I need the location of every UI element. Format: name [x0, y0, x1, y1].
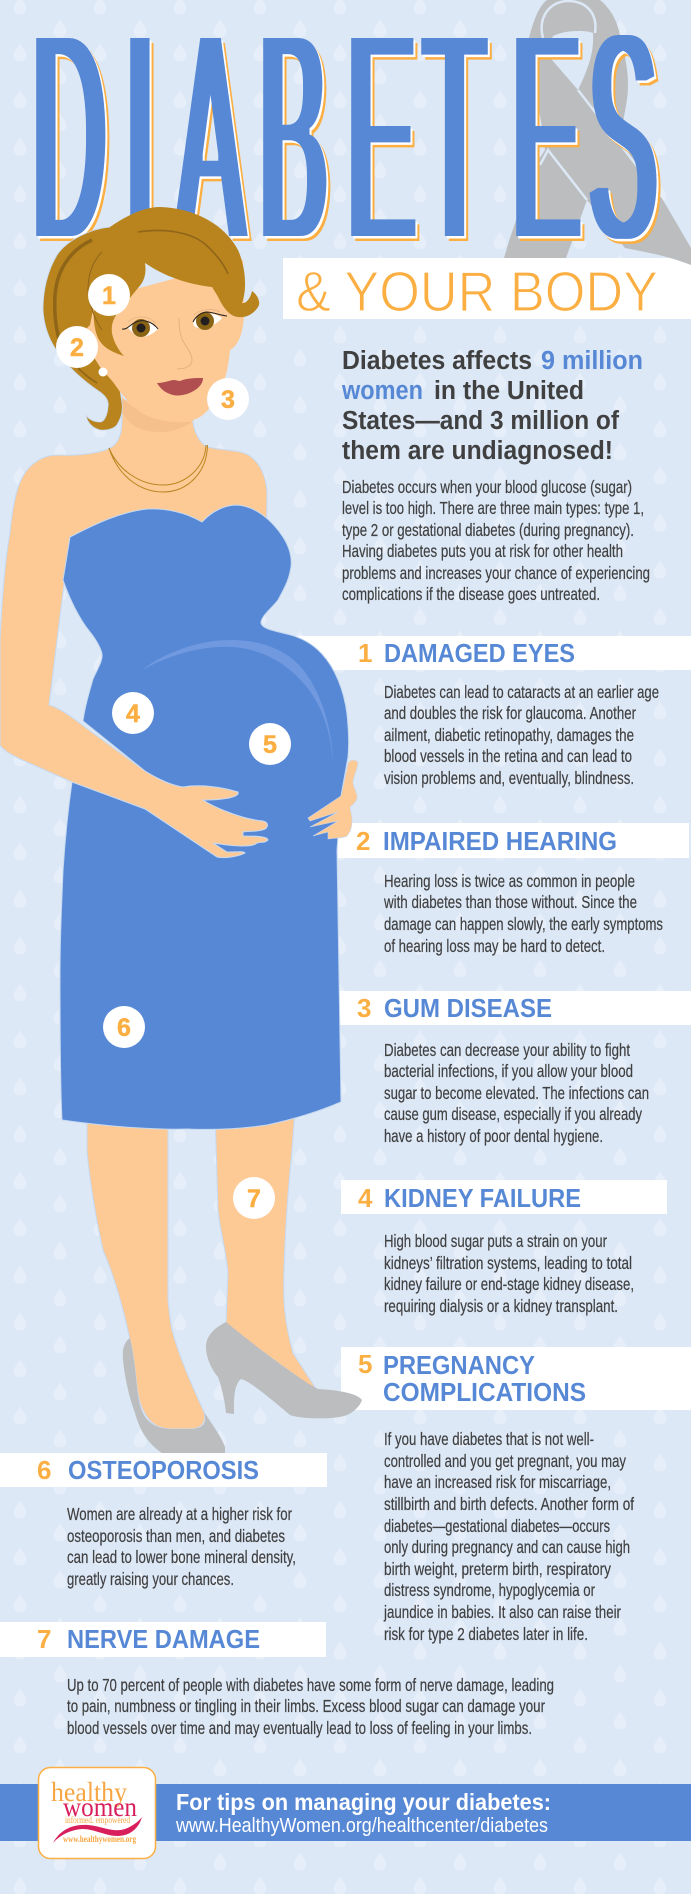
logo: healthy women — [38, 1768, 156, 1858]
body text 3: have a history of poor dental hygiene. — [384, 1126, 603, 1146]
intro heading: in the United — [434, 377, 584, 405]
heading band 4 — [341, 1180, 667, 1214]
logo: healthy women: women — [63, 1792, 137, 1822]
panel: kidney failure — [341, 1180, 667, 1316]
marker 1 — [88, 274, 130, 316]
body text 5: birth weight, preterm birth, respiratory — [384, 1559, 611, 1579]
heading band 5 — [341, 1347, 691, 1410]
dress — [60, 505, 349, 1129]
heading band 6 — [0, 1453, 327, 1487]
body text 5: diabetes—gestational diabetes—occurs — [384, 1516, 610, 1536]
marker 3: 3 — [221, 386, 235, 414]
number 1: 1 — [358, 638, 372, 668]
body text 7: to pain, numbness or tingling in their limbs. Excess blood sugar can damage your — [67, 1696, 545, 1716]
number 7: 7 — [37, 1624, 51, 1654]
heading: damaged eyes: DAMAGED EYES — [384, 638, 575, 668]
intro heading — [341, 347, 643, 465]
intro heading: Diabetes affects — [342, 347, 532, 375]
logo: healthy women: www.healthywomen.org — [63, 1834, 136, 1844]
heading: impaired hearing: IMPAIRED HEARING — [383, 826, 617, 856]
intro heading: them are undiagnosed! — [342, 437, 613, 465]
marker 1: 1 — [102, 282, 116, 310]
marker 2: 2 — [70, 334, 84, 362]
body text 4: requiring dialysis or a kidney transplant. — [384, 1296, 618, 1316]
body text 5 — [383, 1429, 634, 1644]
body text 7 — [67, 1675, 554, 1738]
marker 5 — [249, 723, 291, 765]
body text 6: greatly raising your chances. — [67, 1569, 234, 1589]
lips — [157, 378, 203, 396]
heading: osteoporosis: OSTEOPOROSIS — [68, 1455, 259, 1485]
hair back — [43, 227, 140, 430]
body text 5: jaundice in babies. It also can raise their — [383, 1602, 621, 1622]
body text 3 — [384, 1040, 649, 1146]
icon: awareness ribbon — [504, 0, 691, 265]
earring — [98, 368, 108, 376]
body text 5: risk for type 2 diabetes later in life. — [384, 1624, 588, 1644]
right hand — [308, 760, 358, 839]
heading: kidney failure: KIDNEY FAILURE — [384, 1183, 581, 1213]
marker 4: 4 — [126, 700, 140, 728]
marker 5: 5 — [263, 731, 277, 759]
body text 4: High blood sugar puts a strain on your — [384, 1231, 607, 1251]
intro heading: women — [341, 377, 423, 405]
body text 6 — [67, 1504, 296, 1589]
body text 5: distress syndrome, hypoglycemia or — [384, 1580, 595, 1600]
panel: damaged eyes — [290, 636, 691, 788]
left shoe — [123, 1338, 225, 1455]
marker 7: 7 — [247, 1185, 261, 1213]
number 6: 6 — [37, 1455, 51, 1485]
heading: gum disease: GUM DISEASE — [384, 993, 552, 1023]
legs — [87, 1110, 318, 1429]
heading: pregnancy complications: PREGNANCY — [383, 1350, 535, 1380]
white band behind subtitle — [283, 258, 691, 319]
marker 2 — [56, 326, 98, 368]
hair fringe — [94, 207, 259, 356]
intro heading: 9 million — [541, 347, 643, 375]
necklace — [109, 445, 208, 492]
body text 6: osteoporosis than men, and diabetes — [67, 1526, 285, 1546]
number 4: 4 — [358, 1183, 373, 1213]
intro heading: States—and 3 million of — [342, 407, 619, 435]
heading band 3 — [330, 991, 691, 1025]
number 5: 5 — [358, 1349, 372, 1379]
body text 2 — [383, 871, 663, 956]
marker 4 — [112, 692, 154, 734]
subtitle: & YOUR BODY — [296, 260, 658, 324]
torso and arm skin — [0, 400, 268, 858]
logo: healthy women: healthy — [51, 1777, 127, 1807]
body text 5: If you have diabetes that is not well- — [384, 1429, 594, 1449]
panel: osteoporosis — [0, 1453, 327, 1589]
body text 7: blood vessels over time and may eventually lead to loss of feeling in your limbs. — [67, 1718, 532, 1738]
body text 2: of hearing loss may be hard to detect. — [384, 936, 605, 956]
intro paragraph — [342, 477, 650, 604]
number 3: 3 — [357, 993, 371, 1023]
marker 6 — [103, 1006, 145, 1048]
right shoe — [206, 1322, 362, 1418]
belly highlight — [142, 640, 333, 761]
heading band 2 — [330, 823, 689, 858]
logo: healthy women: informed. empowered — [65, 1815, 130, 1826]
nose — [177, 318, 192, 369]
heading band 1 — [290, 636, 691, 670]
body text 4 — [384, 1231, 634, 1316]
panel: gum disease — [330, 991, 691, 1146]
marker 6: 6 — [117, 1014, 131, 1042]
body text 6: Women are already at a higher risk for — [67, 1504, 292, 1524]
heading: nerve damage: NERVE DAMAGE — [67, 1624, 260, 1654]
left eye — [122, 317, 158, 337]
heading: pregnancy complications: COMPLICATIONS — [383, 1377, 586, 1407]
footer url: www.HealthyWomen.org/healthcenter/diabetes — [175, 1815, 548, 1837]
intro paragraph: complications if the disease goes untreated. — [342, 584, 600, 604]
heading band 7 — [0, 1622, 326, 1657]
hair strands — [55, 230, 228, 383]
body text 5: have an increased risk for miscarriage, — [384, 1472, 611, 1492]
footer band — [0, 1784, 691, 1841]
number 2: 2 — [356, 826, 370, 856]
body text 6: can lead to lower bone mineral density, — [67, 1547, 296, 1567]
heading: pregnancy complications — [383, 1350, 586, 1407]
panel: nerve damage — [0, 1622, 554, 1738]
neck shadow and face — [80, 260, 244, 432]
marker 3 — [207, 378, 249, 420]
footer call to action: For tips on managing your diabetes: — [176, 1789, 551, 1815]
panel: impaired hearing — [330, 823, 689, 956]
panel: pregnancy complications — [341, 1347, 691, 1644]
body text 1 — [384, 682, 659, 788]
marker 7 — [233, 1177, 275, 1219]
illustration: pregnant woman — [0, 207, 362, 1455]
right eye — [193, 310, 227, 330]
